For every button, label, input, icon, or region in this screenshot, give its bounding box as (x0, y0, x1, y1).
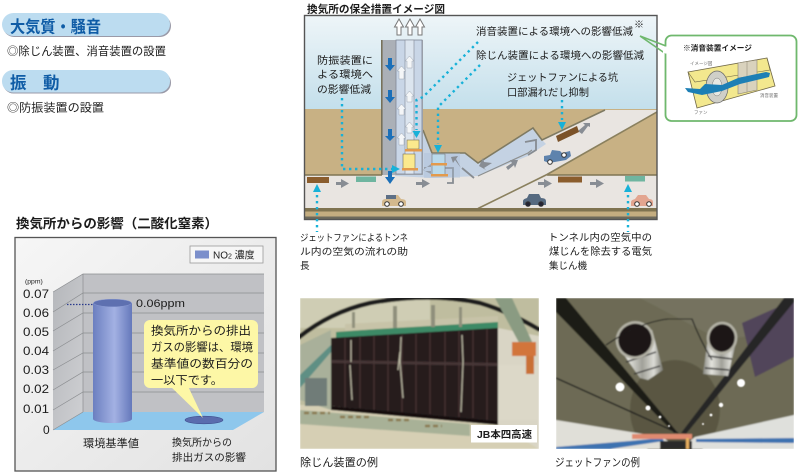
reference line (67, 304, 93, 306)
label: jet fan portal control: 口部漏れだし抑制 (507, 86, 589, 99)
bar: standard value (93, 299, 132, 423)
label: silencer effect: 消音装置による環境への影響低減 (476, 25, 634, 38)
grey airflow arrows (336, 123, 604, 188)
callout: silencer image: ファン (694, 110, 708, 116)
callout: exhaust gas note: 換気所からの排出 (151, 324, 251, 338)
callout: exhaust gas note (144, 320, 258, 418)
diagram title: 換気所の保全措置イメージ図 (307, 2, 445, 16)
text: vibration measures: ◎防振装置の設置 (7, 100, 105, 114)
y axis labels: 0.07 (23, 287, 49, 301)
jet fans and dust collectors (307, 126, 645, 183)
value label: 0.06ppm (136, 298, 185, 310)
legend (190, 246, 263, 263)
label: jet fan portal control: ジェットファンによる坑 (507, 72, 619, 84)
label: jet fan flow assist: ル内の空気の流れの助 (300, 246, 408, 258)
label: electrostatic precipitator: 集じん機 (549, 260, 587, 272)
heading pill: air quality and noise (2, 13, 171, 37)
frame (304, 16, 657, 220)
label: jet fan portal control (507, 72, 619, 99)
note mark: ※ (634, 20, 644, 31)
label: jet fan flow assist (300, 233, 408, 272)
label: vibration isolation effect (317, 54, 373, 96)
photo: jet fans (556, 298, 794, 460)
dotted leader lines and cyan arrowheads (313, 42, 632, 232)
down airflow arrows (385, 58, 395, 184)
panel: NO2 bar chart: 換気所からの (172, 436, 232, 449)
bar: exhaust effect (185, 416, 223, 424)
callout: exhaust gas note: 基準値の数百分の (151, 356, 253, 370)
callout: silencer image: ※消音装置イメージ (683, 42, 752, 52)
label: electrostatic precipitator: トンネル内の空気中の (548, 231, 652, 244)
ramp tunnel (482, 110, 656, 175)
cars (382, 150, 653, 206)
chart walls and floor (53, 274, 264, 430)
y axis labels (23, 278, 50, 437)
panel: NO2 bar chart: 排出ガスの影響 (172, 451, 246, 464)
up airflow arrows (397, 56, 414, 145)
label: electrostatic precipitator: 煤じんを除去する電気 (549, 245, 652, 258)
caption: dust collector: 除じん装置の例 (300, 455, 378, 469)
y axis labels: 0.05 (23, 325, 49, 339)
y axis labels: 0 (43, 423, 50, 437)
y axis labels: 0.02 (23, 382, 49, 396)
panel: ventilation station diagram (304, 16, 657, 220)
label: vibration isolation effect: の影響低減 (317, 83, 372, 96)
legend: NO2 濃度 (213, 248, 255, 262)
caption: jet fans: ジェットファンの例 (555, 455, 640, 469)
photo credit label: JB本四高速 (477, 428, 532, 441)
x axis labels: 環境基準値 (83, 437, 139, 450)
photo credit label (471, 425, 537, 442)
main road tunnel (305, 175, 657, 208)
panel: NO2 bar chart (15, 238, 276, 471)
label: electrostatic precipitator (548, 231, 652, 272)
callout: exhaust gas note: ガスの影響は、環境 (151, 340, 254, 354)
ventilation duct (395, 128, 546, 178)
ventilation shaft (381, 40, 423, 175)
y axis labels: 0.01 (23, 402, 49, 416)
y axis labels: 0.06 (23, 306, 49, 320)
y axis labels: (ppm) (25, 278, 43, 286)
heading pill: vibration (2, 70, 171, 94)
label: jet fan flow assist: 長 (300, 261, 310, 272)
text: air quality measures: ◎除じん装置、消音装置の設置 (7, 44, 166, 58)
heading pill: vibration: 動 (43, 74, 60, 92)
y axis labels: 0.03 (23, 363, 49, 377)
label: vibration isolation effect: よる環境へ (317, 69, 373, 81)
heading pill: air quality and noise: 大気質・騒音 (10, 16, 101, 36)
label: dust collector effect: 除じん装置による環境への影響低減 (476, 49, 645, 62)
photo: dust collector (298, 298, 540, 449)
exhaust arrows (394, 19, 424, 35)
road base bands (305, 208, 657, 212)
label: vibration isolation effect: 防振装置に (317, 54, 373, 67)
callout: silencer image: イメージ図 (690, 61, 713, 67)
callout: exhaust gas note: 一以下です。 (151, 374, 223, 387)
silencer and vibration devices (402, 140, 448, 176)
heading pill: vibration: 振 (10, 74, 27, 92)
callout: silencer image (640, 36, 796, 121)
y axis labels: 0.04 (23, 344, 49, 358)
chart title: 換気所からの影響（二酸化窒素） (16, 215, 218, 231)
callout: silencer image: 消音装置 (760, 92, 778, 99)
label: jet fan flow assist: ジェットファンによるトンネ (300, 233, 408, 244)
